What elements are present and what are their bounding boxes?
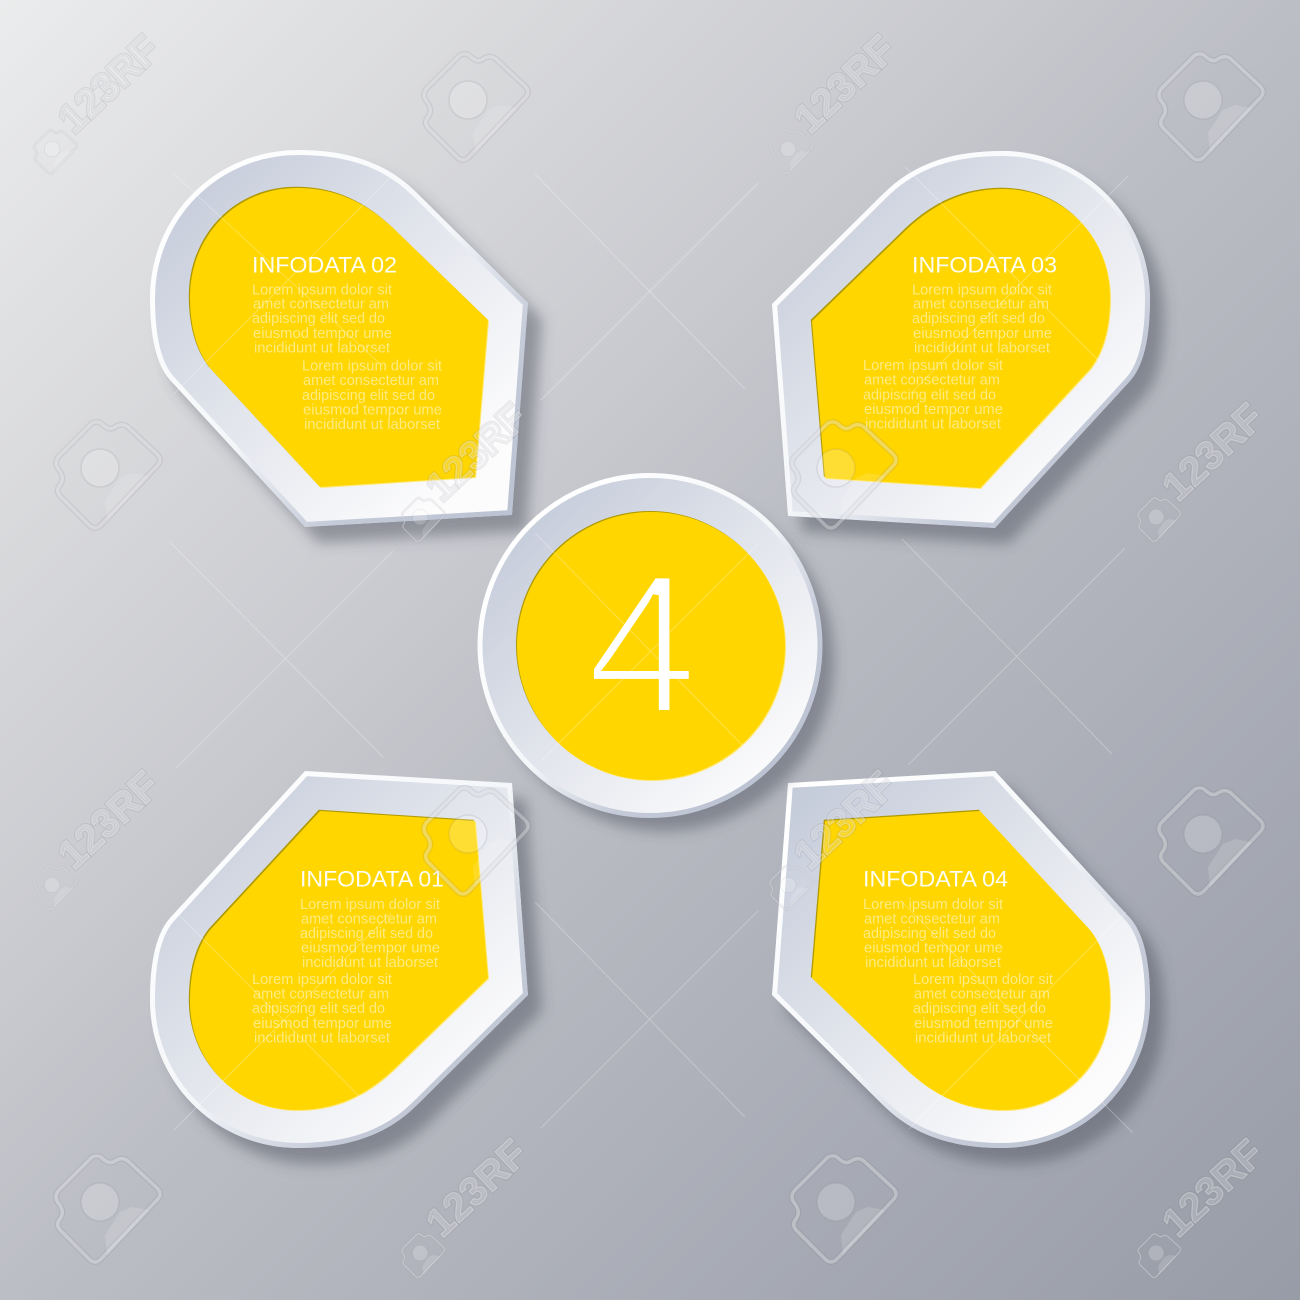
watermark: 123RF logos: 123RF [50,28,168,142]
text block: infodata 01 second: adipiscing elit sed do [252,1001,385,1017]
text block: infodata 03 first: eiusmod tempor ume [913,326,1052,342]
number 4: 4 [586,533,698,756]
watermark: 123RF logos: 123RF [50,28,168,142]
text block: infodata 03 second: eiusmod tempor ume [864,402,1003,418]
text block: infodata 02 second: amet consectetur am [303,373,439,389]
text block: infodata 01 first: adipiscing elit sed do [300,926,433,942]
watermark: 123RF logos: 123RF [418,396,536,510]
text block: infodata 01 first: eiusmod tempor ume [301,941,440,957]
text block: infodata 03 second: Lorem ipsum dolor sit [863,358,1003,374]
shadow: infodata 02 [164,166,542,543]
text block: infodata 03 second: incididunt ut laborset [865,417,1001,433]
text block: infodata 04 first: Lorem ipsum dolor sit [863,897,1003,913]
heading: infodata 04: INFODATA 04 [863,866,1008,892]
yellow area: infodata 03 [811,188,1111,489]
text block: infodata 04 second: incididunt ut laborset [915,1030,1051,1046]
watermark: 123RF logos: 123RF [1154,396,1272,510]
heading: infodata 03: INFODATA 03 [912,252,1057,278]
ring: infodata 03 [772,151,1150,528]
text block: infodata 02 first: eiusmod tempor ume [253,326,392,342]
text block: infodata 03 first: incididunt ut laborset [914,340,1050,356]
text block: infodata 04 first: adipiscing elit sed do [863,926,996,942]
watermark: thin crossing lines [170,167,1133,1133]
text block: infodata 02 first: amet consectetur am [253,297,389,313]
watermark: 123RF logos: 123RF [1154,1132,1272,1246]
text block: infodata 01 second: amet consectetur am [253,986,389,1002]
text block: infodata 04 second: adipiscing elit sed do [913,1001,1046,1017]
shadow: infodata 04 [786,787,1164,1164]
text block: infodata 01 first: amet consectetur am [301,911,437,927]
text block: infodata 03 first: Lorem ipsum dolor sit [912,282,1052,298]
watermark: 123RF logos: 123RF [418,1132,536,1246]
text block: infodata 03 second: adipiscing elit sed do [863,387,996,403]
text block: infodata 01 second [252,972,392,1046]
text block: infodata 04 first: amet consectetur am [864,911,1000,927]
text block: infodata 03 second [863,358,1003,433]
watermark: 123RF logos: 123RF [786,28,904,142]
text block: infodata 02 second [302,359,442,433]
text block: infodata 02 second: adipiscing elit sed do [302,388,435,404]
text block: infodata 04 second [913,972,1053,1046]
text block: infodata 01 second: eiusmod tempor ume [253,1016,392,1032]
text block: infodata 03 first [912,282,1052,356]
text block: infodata 02 second: eiusmod tempor ume [303,403,442,419]
watermark: 123RF logos: 123RF [786,28,904,142]
heading: infodata 02: INFODATA 02 [252,252,397,278]
panel: center circle [480,476,834,831]
text block: infodata 01 second: Lorem ipsum dolor sit [252,972,392,988]
text block: infodata 03 first: amet consectetur am [913,297,1049,313]
yellow disc [516,511,786,781]
watermark: 123RF logos: 123RF [786,764,904,878]
text block: infodata 04 second: amet consectetur am [914,986,1050,1002]
text block: infodata 02 second: incididunt ut laborset [304,417,440,433]
shadow: center circle [494,491,834,831]
text block: infodata 01 second: incididunt ut laborset [254,1030,390,1046]
text block: infodata 04 first: eiusmod tempor ume [864,941,1003,957]
shadow: infodata 03 [786,167,1164,544]
panel: infodata 04 [772,771,1164,1164]
text block: infodata 01 first [300,897,440,971]
text block: infodata 04 second: eiusmod tempor ume [914,1016,1053,1032]
text block: infodata 04 first: incididunt ut laborset [865,955,1001,971]
ring: infodata 01 [150,771,528,1148]
text block: infodata 04 first [863,897,1003,971]
yellow area: infodata 01 [189,810,489,1111]
heading: infodata 01: INFODATA 01 [300,866,444,892]
ring: infodata 02 [150,150,528,527]
yellow area: infodata 04 [811,810,1111,1111]
watermark: 123RF logos: 123RF [418,1132,536,1246]
text block: infodata 03 second: amet consectetur am [864,372,1000,388]
text block: infodata 02 second: Lorem ipsum dolor sit [302,359,442,375]
yellow area: infodata 02 [189,187,489,488]
text block: infodata 04 second: Lorem ipsum dolor sit [913,972,1053,988]
panel: infodata 02 [150,150,542,543]
ring: center circle [480,476,820,816]
text block: infodata 01 first: Lorem ipsum dolor sit [300,897,440,913]
text block: infodata 02 first: incididunt ut laborset [254,340,390,356]
watermark: 123RF logos: 123RF [418,396,536,510]
watermark: 123RF logos: 123RF [786,764,904,878]
text block: infodata 02 first: adipiscing elit sed do [252,311,385,327]
watermark: 123RF logos: 123RF [1154,396,1272,510]
watermark: 123RF logos: 123RF [50,764,168,878]
text block: infodata 02 first [252,282,392,356]
text block: infodata 02 first: Lorem ipsum dolor sit [252,282,392,298]
panel: infodata 03 [772,151,1164,544]
shadow: infodata 01 [164,787,542,1164]
watermark: 123RF logos: 123RF [50,764,168,878]
ring: infodata 04 [772,771,1150,1148]
text block: infodata 03 first: adipiscing elit sed do [912,311,1045,327]
panel: infodata 01 [150,771,542,1164]
watermark: 123RF logos: 123RF [1154,1132,1272,1246]
text block: infodata 01 first: incididunt ut laborset [302,955,438,971]
